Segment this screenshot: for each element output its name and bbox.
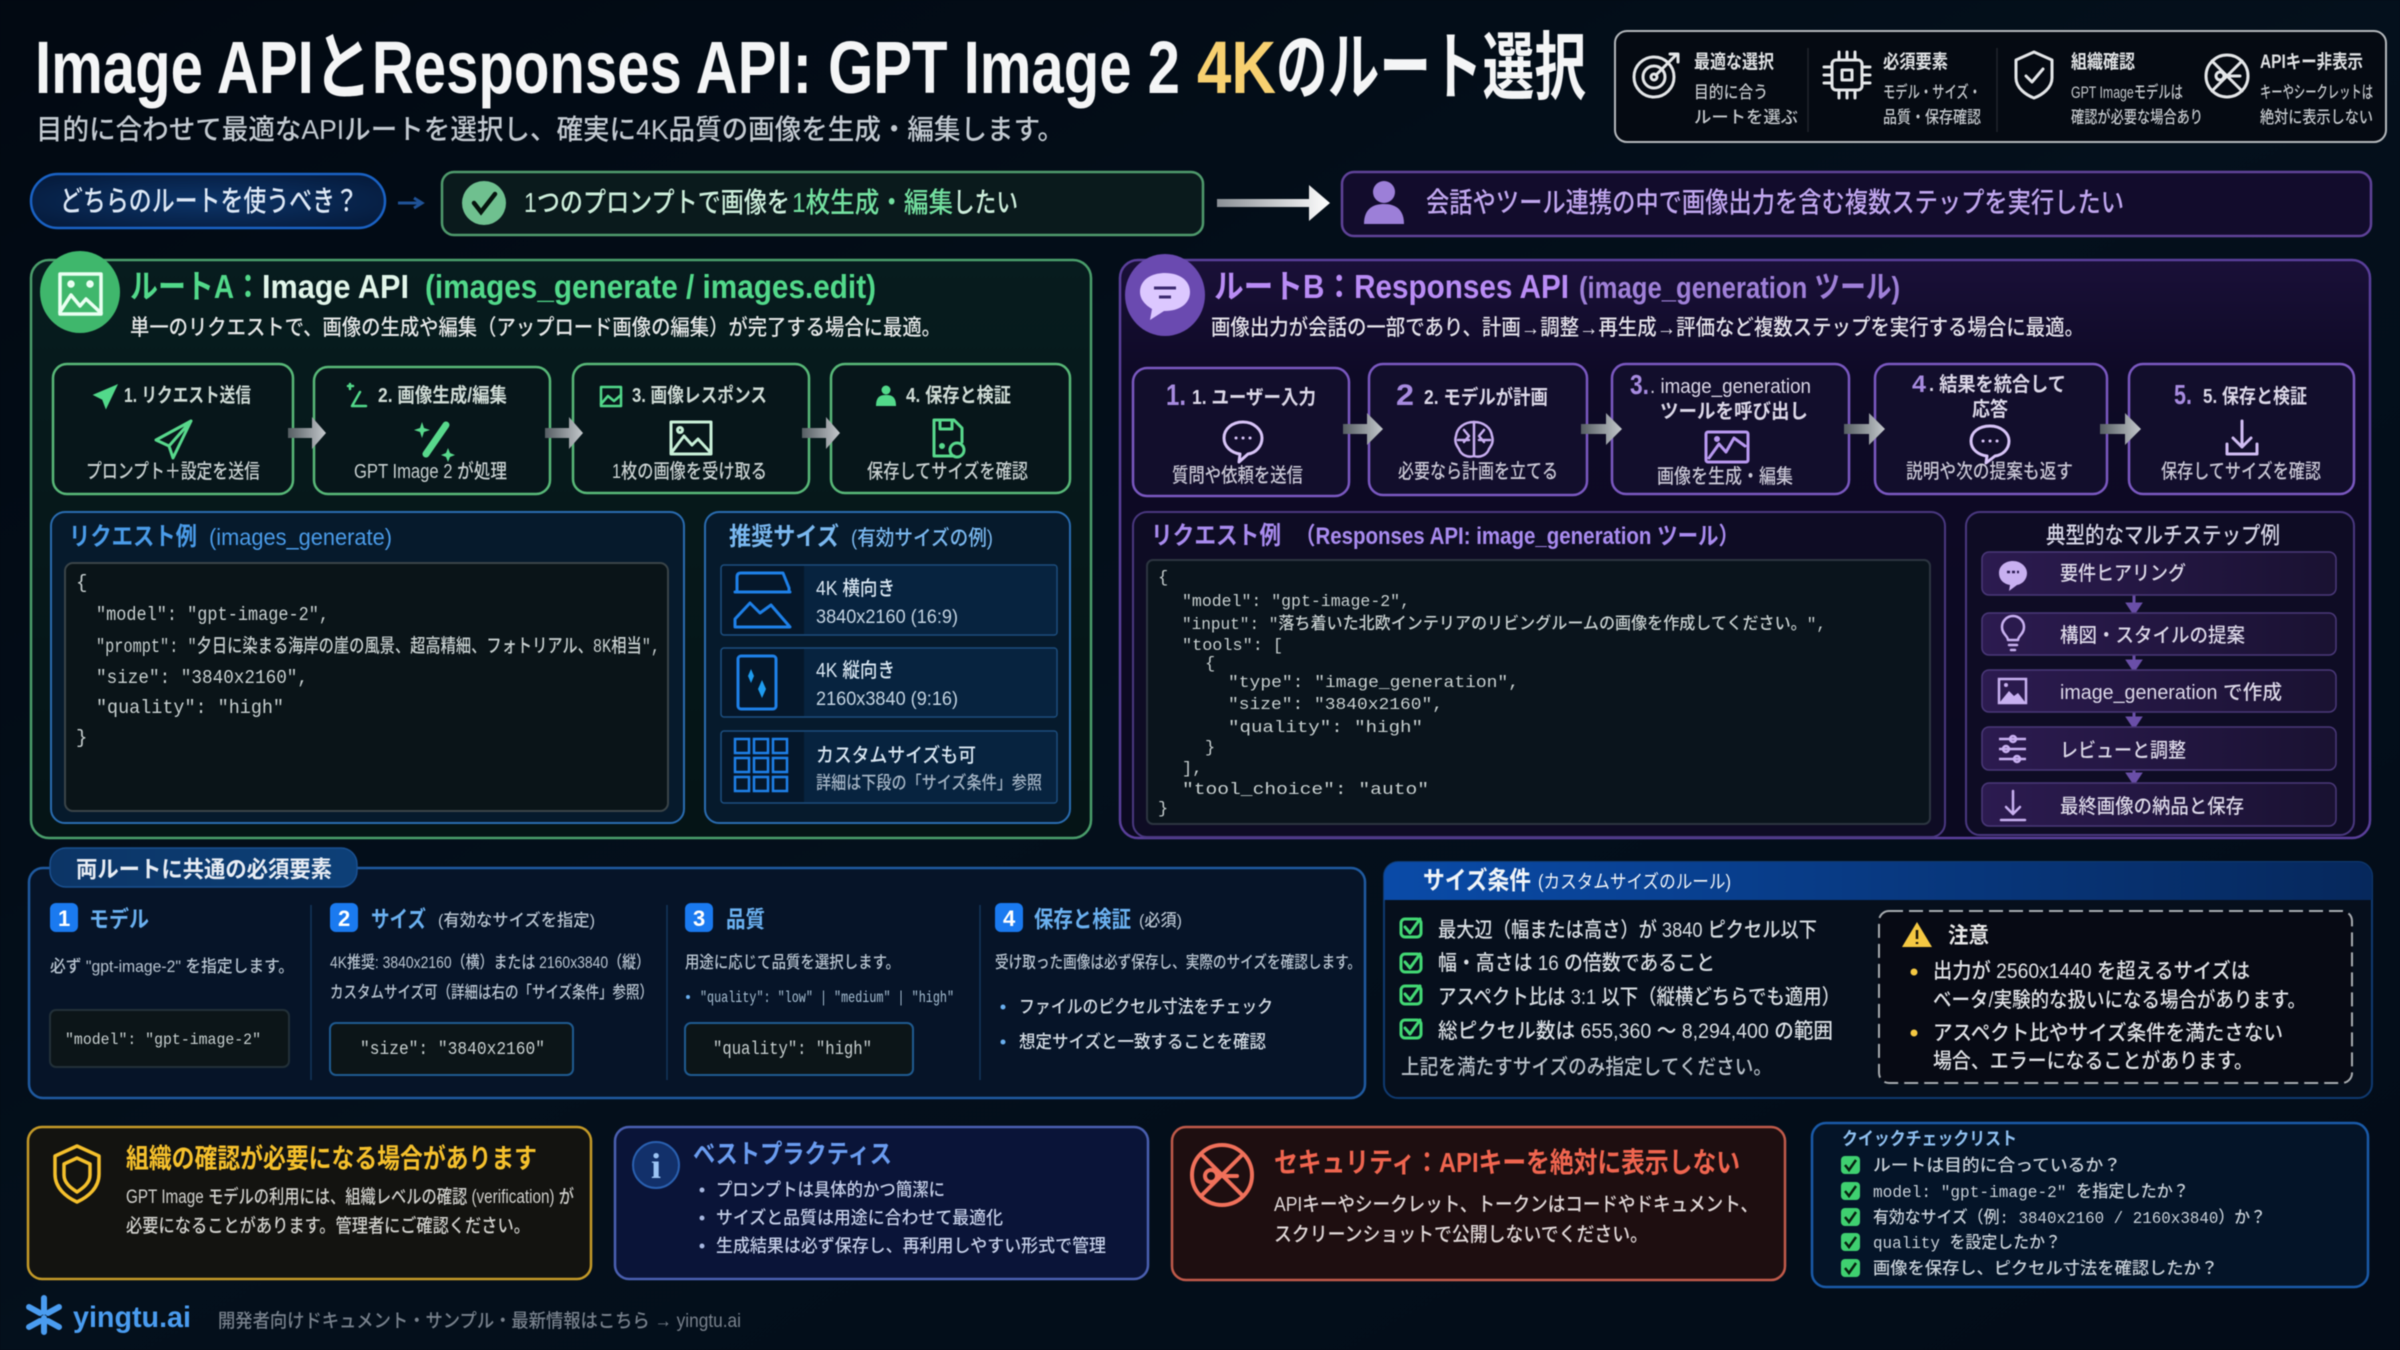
panel: quick checklist	[1812, 1123, 2368, 1287]
step A3	[573, 364, 809, 493]
code block B: }	[1158, 800, 1168, 819]
caution box: ベータ/実験的な扱いになる場合があります。	[1933, 989, 2306, 1012]
step B4: 説明や次の提案も返す	[1906, 460, 2073, 483]
column: size: 4K推奨: 3840x2160（横）または 2160x3840（縦）	[330, 953, 650, 972]
legend text: organization: 組織確認	[2071, 51, 2135, 73]
code block B: {	[1158, 569, 1168, 588]
code block A: "quality": "high"	[96, 697, 284, 719]
yellow body	[126, 1185, 574, 1237]
code block B: "quality": "high"	[1228, 719, 1423, 738]
size row: portrait: 2160x3840 (9:16)	[816, 689, 958, 710]
row: review	[1982, 727, 2336, 770]
caution box	[1879, 911, 2352, 1083]
size row: custom: 詳細は下段の「サイズ条件」参照	[816, 772, 1042, 793]
legend text: hide API key	[2260, 51, 2373, 127]
step B2: 2. モデルが計画	[1424, 385, 1548, 409]
legend text: best choice	[1694, 51, 1798, 127]
code block B: ],	[1182, 760, 1202, 779]
icon: no key	[1192, 1145, 1252, 1205]
caution box: 注意	[1948, 923, 1989, 948]
icon: person	[1364, 181, 1404, 224]
route A heading: Image API	[262, 268, 409, 305]
row: requirements	[1982, 552, 2336, 595]
step B5: 5. 保存と検証	[2203, 385, 2307, 408]
step B2: 必要なら計画を立てる	[1398, 460, 1558, 483]
code block B: "input": "落ち着いた北欧インテリアのリビングルームの画像を作成してください。",	[1182, 614, 1826, 635]
column: quality	[685, 903, 954, 1075]
column: model: モデル	[89, 906, 149, 932]
legend text: best choice: 最適な選択	[1694, 51, 1774, 73]
arrows: route A steps	[288, 417, 840, 449]
icon: chip	[1824, 52, 1870, 98]
code block B: "model": "gpt-image-2",	[1182, 593, 1410, 612]
panel: route B	[1120, 254, 2370, 838]
request B heading: （Responses API: image_generation ツール）	[1295, 523, 1739, 550]
step B5: 保存してサイズを確認	[2161, 460, 2321, 483]
step A2: GPT Image 2 が処理	[354, 460, 507, 483]
option A text	[524, 187, 1018, 218]
multi-step heading: 典型的なマルチステップ例	[2046, 522, 2280, 548]
legend text: required: 必須要素	[1883, 51, 1948, 73]
footer logo: yingtu.ai	[73, 1301, 191, 1334]
red title: セキュリティ：APIキーを絶対に表示しない	[1274, 1147, 1740, 1178]
panel: recommended sizes	[705, 512, 1070, 823]
column: model	[50, 903, 294, 1067]
column: quality: 品質	[726, 906, 765, 932]
code block A	[65, 563, 668, 811]
callout: organization verification	[28, 1127, 591, 1279]
option B box	[1342, 172, 2371, 236]
route B heading: (image_generation ツール)	[1579, 270, 1900, 305]
condition text: 最大辺（幅または高さ）が 3840 ピクセル以下	[1438, 919, 1817, 942]
legend text: required: モデル・サイズ・	[1883, 82, 1981, 102]
icon: info: i	[651, 1146, 661, 1186]
checklist items: quality を設定したか？	[1873, 1233, 2061, 1254]
code block A: "prompt": "夕日に染まる海岸の崖の風景、超高精細、フォトリアル、8K相当",	[96, 635, 660, 658]
request A heading: (images_generate)	[209, 524, 392, 550]
code block A: "model": "gpt-image-2",	[96, 604, 329, 626]
red body: スクリーンショットで公開しないでください。	[1274, 1223, 1648, 1246]
panel: route A	[31, 251, 1091, 838]
row: composition: 構図・スタイルの提案	[2060, 624, 2245, 647]
blue title: ベストプラクティス	[693, 1139, 892, 1169]
panel: common requirements	[29, 848, 1365, 1098]
red body	[1274, 1193, 1758, 1246]
callout: security	[1172, 1127, 1785, 1280]
step A1: プロンプト＋設定を送信	[86, 460, 260, 483]
title: Image APIとResponses API: GPT Image 2	[35, 26, 1180, 109]
step B1: 質問や依頼を送信	[1172, 464, 1303, 487]
legend text: required	[1883, 51, 1981, 127]
route B description: 画像出力が会話の一部であり、計画→調整→再生成→評価など複数ステップを実行する場合に最適。	[1211, 315, 2084, 340]
row: composition	[1982, 613, 2336, 655]
size row: landscape: 4K 横向き	[816, 577, 895, 600]
legend text: organization: GPT Imageモデルは	[2071, 82, 2183, 102]
column: save and verify: ファイルのピクセル寸法をチェック	[1019, 997, 1273, 1017]
code block B: {	[1205, 655, 1215, 674]
route A heading: ルートA：	[130, 268, 262, 305]
step A4: 4. 保存と検証	[906, 384, 1011, 407]
icon: no key	[2206, 55, 2248, 97]
option B text: 会話やツール連携の中で画像出力を含む複数ステップを実行したい	[1426, 187, 2124, 218]
checklist items: model: "gpt-image-2" を指定したか？	[1873, 1182, 2189, 1203]
column: save and verify: 保存と検証	[1034, 906, 1131, 932]
icon: check	[462, 181, 506, 225]
size row: landscape	[721, 565, 1057, 635]
checklist title: クイックチェックリスト	[1842, 1129, 2017, 1149]
question pill: どちらのルートを使うべき？	[60, 185, 358, 218]
step B4: 応答	[1972, 397, 2008, 421]
condition text: 上記を満たすサイズのみ指定してください。	[1401, 1056, 1772, 1079]
icon: info	[633, 1142, 679, 1188]
arrow: white	[1217, 185, 1330, 221]
legend text: organization	[2071, 51, 2203, 127]
step A1	[53, 364, 293, 494]
condition text: アスペクト比は 3:1 以下（縦横どちらでも適用）	[1438, 986, 1840, 1009]
code block A: "size": "3840x2160",	[96, 667, 308, 689]
icon: shield	[55, 1146, 99, 1202]
flow arrows	[2128, 595, 2140, 783]
code block B: "tool_choice": "auto"	[1182, 781, 1429, 800]
request A heading: リクエスト例	[69, 523, 197, 551]
caution box: 場合、エラーになることがあります。	[1933, 1050, 2253, 1073]
step A4: 保存してサイズを確認	[867, 460, 1028, 483]
row: requirements: 要件ヒアリング	[2060, 562, 2186, 585]
footer text: 開発者向けドキュメント・サンプル・最新情報はこちら → yingtu.ai	[218, 1310, 741, 1332]
route B heading: ルートB：Responses API	[1214, 268, 1569, 305]
step B1: 1. ユーザー入力	[1192, 386, 1316, 409]
row: delivery	[1982, 783, 2336, 826]
size row: custom	[721, 731, 1057, 803]
legend text: best choice: ルートを選ぶ	[1694, 108, 1798, 127]
question pill	[31, 174, 385, 228]
size row: portrait	[721, 648, 1057, 717]
condition text	[1401, 919, 1840, 1079]
step B4	[1875, 364, 2107, 494]
arrow: question to option	[398, 198, 422, 208]
caution box: 出力が 2560x1440 を超えるサイズは	[1933, 960, 2250, 983]
step B2: 2	[1396, 379, 1414, 412]
column: model: "model": "gpt-image-2"	[65, 1031, 261, 1049]
option A text: したい	[953, 187, 1018, 218]
column: size: (有効なサイズを指定)	[438, 910, 595, 930]
size conditions heading: (カスタムサイズのルール)	[1538, 871, 1731, 893]
column: model: 必ず "gpt-image-2" を指定します。	[50, 957, 294, 976]
column: quality: "quality": "low" | "medium" | "high"	[700, 989, 954, 1007]
common heading pill: 両ルートに共通の必須要素	[76, 856, 332, 882]
code block B: "type": "image_generation",	[1228, 674, 1519, 693]
legend text: required: 品質・保存確認	[1883, 108, 1981, 127]
title: のルート選択	[1276, 26, 1586, 109]
code block A: {	[76, 572, 87, 594]
route A heading	[130, 268, 876, 305]
title: 4K	[1197, 26, 1276, 109]
size row: portrait: 4K 縦向き	[816, 659, 895, 682]
common heading pill	[50, 848, 357, 887]
step B1: 1.	[1166, 379, 1186, 412]
condition text: 幅・高さは 16 の倍数であること	[1438, 952, 1715, 975]
route A description: 単一のリクエストで、画像の生成や編集（アップロード画像の編集）が完了する場合に最適。	[130, 315, 941, 340]
panel: key points legend	[1615, 31, 2386, 142]
panel: request example A	[51, 512, 684, 823]
red body: APIキーやシークレット、トークンはコードやドキュメント、	[1274, 1193, 1758, 1216]
step A2: 2. 画像生成/編集	[378, 383, 507, 407]
row: review: レビューと調整	[2060, 739, 2186, 762]
column: quality: "quality": "high"	[713, 1040, 872, 1060]
request B heading	[1151, 522, 1739, 550]
checklist items	[1873, 1156, 2266, 1278]
icon: warning	[1902, 922, 1932, 947]
row: generation	[1982, 670, 2336, 712]
blue list	[700, 1180, 1106, 1256]
column: size: "size": "3840x2160"	[360, 1040, 545, 1060]
step A1: 1. リクエスト送信	[124, 384, 251, 407]
yellow body: 必要になることがあります。管理者にご確認ください。	[126, 1215, 530, 1237]
icon: chat circle	[1125, 254, 1205, 336]
size conditions heading	[1423, 866, 1731, 895]
step A4	[831, 364, 1070, 493]
column: quality: 用途に応じて品質を選択します。	[685, 953, 900, 972]
size conditions heading: サイズ条件	[1423, 866, 1531, 895]
condition checks	[1401, 919, 1421, 1038]
caution box: アスペクト比やサイズ条件を満たさない	[1933, 1022, 2283, 1045]
row: generation: image_generation で作成	[2060, 681, 2282, 704]
panel: multi-step example	[1966, 512, 2354, 835]
code block B	[1147, 560, 1930, 824]
code block B: "tools": [	[1182, 637, 1283, 656]
yellow body: GPT Image モデルの利用には、組織レベルの確認 (verification) が	[126, 1185, 574, 1208]
checklist items: 画像を保存し、ピクセル寸法を確認したか？	[1873, 1259, 2218, 1278]
icon: shield check	[2016, 52, 2052, 98]
callout: best practices	[615, 1127, 1148, 1279]
step B3: ツールを呼び出し	[1660, 400, 1808, 423]
code block B: "size": "3840x2160",	[1228, 696, 1443, 715]
panel: request example B	[1133, 512, 1945, 837]
sizes heading: (有効サイズの例)	[851, 527, 993, 550]
checklist items: ルートは目的に合っているか？	[1873, 1156, 2121, 1175]
column: save and verify	[995, 903, 1361, 1052]
column: size: 2	[338, 906, 350, 931]
legend text: hide API key: APIキー非表示	[2260, 51, 2363, 73]
step B2	[1369, 364, 1587, 495]
column: size: カスタムサイズ可（詳細は右の「サイズ条件」参照）	[330, 982, 653, 1002]
column: size: サイズ	[371, 906, 426, 932]
code block A: }	[76, 727, 87, 749]
footer logo	[29, 1298, 191, 1334]
step A3: 3. 画像レスポンス	[632, 384, 767, 407]
legend text: hide API key: 絶対に表示しない	[2260, 108, 2373, 127]
step A3: 1枚の画像を受け取る	[612, 460, 767, 483]
blue list: サイズと品質は用途に合わせて最適化	[716, 1207, 1003, 1228]
yellow title: 組織の確認が必要になる場合があります	[126, 1143, 537, 1174]
checklist boxes	[1841, 1156, 1860, 1277]
option A box	[442, 172, 1203, 235]
request B heading: リクエスト例	[1151, 522, 1281, 550]
step B5: 5.	[2174, 379, 2192, 410]
request A heading	[69, 523, 392, 551]
column: quality: 3	[693, 906, 705, 931]
panel: size conditions	[1384, 862, 2372, 1098]
step B4: 4	[1912, 371, 1927, 398]
column: save and verify: (必須)	[1139, 911, 1182, 930]
step B3: 画像を生成・編集	[1657, 465, 1793, 488]
column: save and verify: 想定サイズと一致することを確認	[1019, 1031, 1266, 1052]
code block B: }	[1205, 739, 1215, 758]
step B4: . 結果を統合して	[1929, 373, 2066, 396]
column: size	[330, 903, 653, 1075]
icon: image circle	[40, 251, 120, 333]
step B3: 3.	[1630, 369, 1649, 400]
icon: target	[1634, 54, 1678, 97]
step A2	[314, 367, 550, 494]
size row: landscape: 3840x2160 (16:9)	[816, 607, 958, 628]
route A heading: (images_generate / images.edit)	[425, 268, 876, 305]
size row: custom: カスタムサイズも可	[816, 744, 976, 767]
legend text: best choice: 目的に合う	[1694, 83, 1768, 102]
column: save and verify: 受け取った画像は必ず保存し、実際のサイズを確認します。	[995, 952, 1361, 972]
legend text: organization: 確認が必要な場合あり	[2071, 107, 2203, 127]
arrows: route B steps	[1343, 413, 2141, 445]
option A text: 1つのプロンプトで画像を	[524, 187, 790, 218]
step B3	[1612, 364, 1849, 494]
option A text: 1枚生成・編集	[792, 187, 953, 218]
step B5	[2129, 364, 2354, 494]
route B heading	[1214, 268, 1900, 305]
step B3: . image_generation	[1650, 376, 1811, 398]
blue list: プロンプトは具体的かつ簡潔に	[716, 1180, 945, 1200]
sizes heading: 推奨サイズ	[729, 522, 839, 551]
step B1	[1133, 368, 1349, 496]
column: save and verify: 4	[1003, 906, 1016, 931]
checklist items: 有効なサイズ（例: 3840x2160 / 2160x3840）か？	[1873, 1207, 2266, 1229]
subtitle: 目的に合わせて最適なAPIルートを選択し、確実に4K品質の画像を生成・編集します。	[36, 114, 1064, 145]
row: delivery: 最終画像の納品と保存	[2060, 795, 2244, 818]
condition text: 総ピクセル数は 655,360 ～ 8,294,400 の範囲	[1438, 1020, 1833, 1043]
column: model: 1	[58, 906, 70, 931]
blue list: 生成結果は必ず保存し、再利用しやすい形式で管理	[716, 1236, 1106, 1256]
sizes heading	[729, 522, 993, 551]
